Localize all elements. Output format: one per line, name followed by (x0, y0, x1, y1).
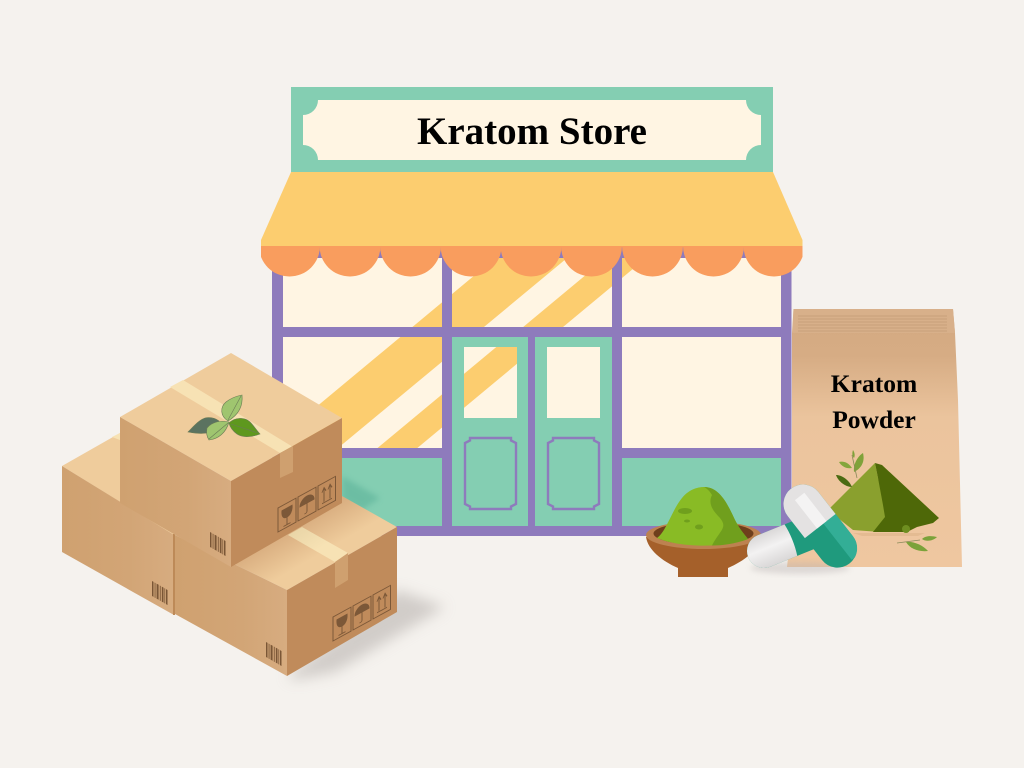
barcode (210, 532, 226, 556)
kratom leaves on box (188, 395, 260, 440)
ground shadow (287, 590, 445, 680)
title: Kratom Store (417, 110, 647, 153)
awning (259, 172, 804, 276)
lower teal wall panels (283, 458, 781, 526)
front-right box (175, 465, 397, 676)
tape (280, 446, 293, 478)
barcode (266, 642, 282, 666)
powder pile on bag (830, 463, 939, 536)
bag label (831, 369, 917, 434)
shop sign (291, 87, 773, 172)
bowl of kratom powder (646, 487, 761, 577)
bowl body (646, 537, 761, 577)
top box (120, 353, 342, 567)
stacked cardboard boxes (62, 353, 445, 680)
leaves on bag (836, 450, 937, 551)
handling icons (278, 476, 336, 532)
bag label: Powder (832, 405, 916, 434)
window glass with diagonal reflections (283, 258, 781, 448)
shadow on wall (342, 476, 380, 510)
scalloped awning edge (261, 246, 802, 276)
capsules (742, 477, 865, 576)
tape (335, 553, 348, 588)
lower capsule (742, 513, 826, 573)
handling icons (333, 585, 390, 641)
kratom powder bag (787, 309, 962, 567)
barcode (152, 581, 168, 605)
back-left box (62, 433, 175, 615)
double door (450, 319, 612, 526)
bag label: Kratom (831, 369, 917, 398)
storefront building (272, 247, 792, 536)
powder mound (657, 487, 748, 546)
upper capsule (776, 477, 865, 576)
purple window frame (272, 246, 792, 536)
